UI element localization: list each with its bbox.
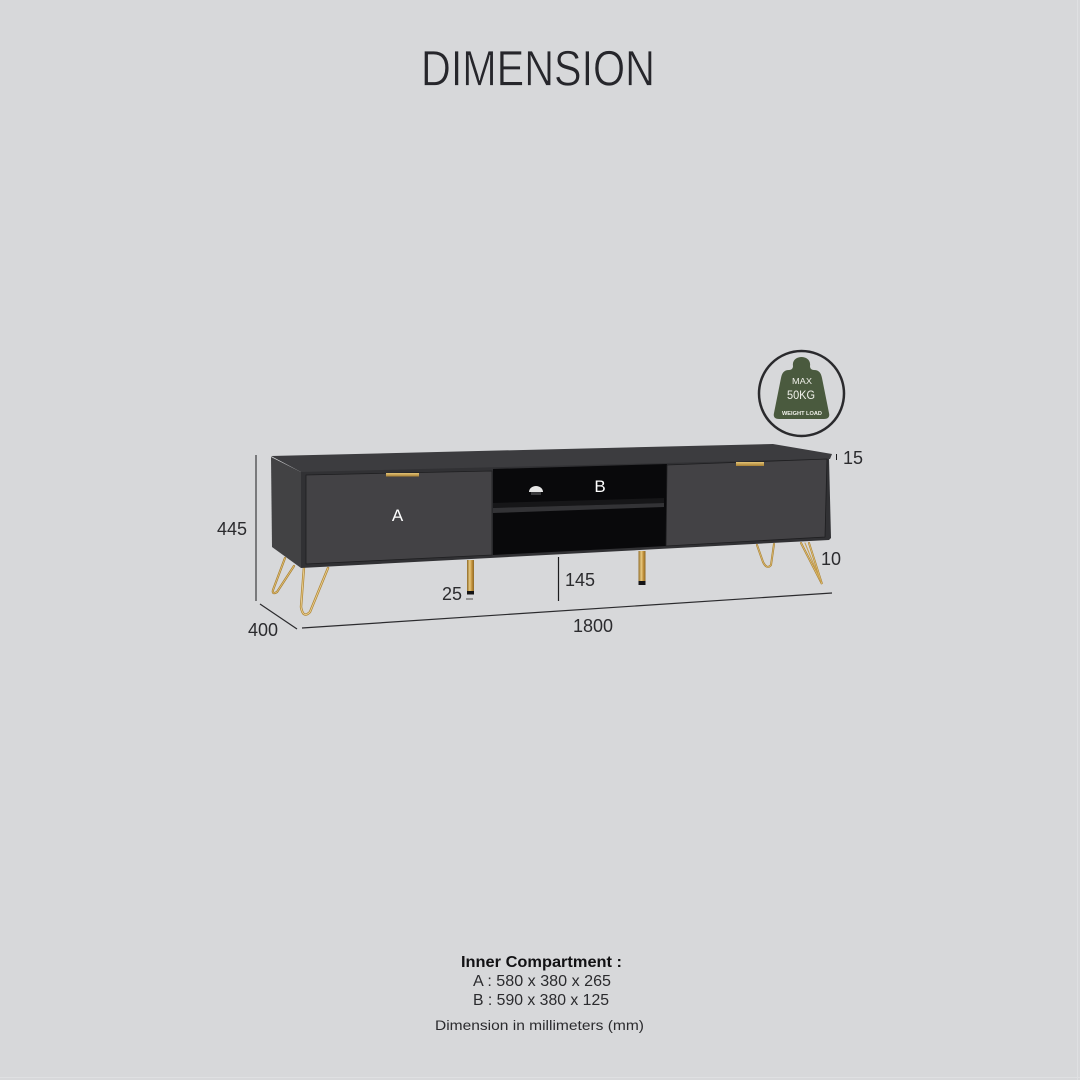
dimension line: depth 400: 400 <box>248 620 278 640</box>
heading: Inner Compartment : <box>461 954 622 971</box>
drawer A <box>306 471 492 564</box>
dimension line: width 1800 <box>302 593 832 636</box>
dimension: leg width 25 <box>442 584 473 604</box>
dimension: leg clearance 145: 145 <box>565 570 595 590</box>
dimension line: height 445: 445 <box>217 519 247 539</box>
cabinet front frame <box>301 458 831 568</box>
centre leg left <box>467 560 474 594</box>
drawer right <box>666 459 827 546</box>
dimension: base thickness 10: 10 <box>821 549 841 569</box>
dimension line: depth 400 <box>248 604 297 640</box>
hairpin legs: front right <box>801 543 822 584</box>
dimension: top thickness 15: 15 <box>843 448 863 468</box>
dimension line: width 1800: 1800 <box>573 616 613 636</box>
hairpin legs: rear right <box>757 544 774 567</box>
badge text: 50kg: 50KG <box>787 388 815 402</box>
badge: max weight load <box>759 351 844 436</box>
inner compartment text block <box>435 954 644 1033</box>
label B: B <box>594 477 606 496</box>
hairpin legs: rear left <box>273 558 294 593</box>
cabinet top surface <box>271 444 832 472</box>
compartment B size: B : 590 x 380 x 125 <box>473 992 609 1009</box>
TV console illustration <box>271 444 832 615</box>
drawer right handle <box>736 462 764 466</box>
badge ring <box>759 351 844 436</box>
hairpin legs: front left <box>301 567 328 615</box>
dimension: leg width 25: 25 <box>442 584 462 604</box>
label A: A <box>392 506 404 525</box>
title: DIMENSION <box>421 40 655 96</box>
icon: weight <box>774 357 829 419</box>
cable hole <box>529 486 543 492</box>
compartment A size: A : 580 x 380 x 265 <box>473 973 611 990</box>
open shelf compartment <box>493 464 667 555</box>
badge text: max: MAX <box>792 377 813 386</box>
dimension: leg clearance 145 <box>558 557 595 601</box>
cabinet side panel <box>271 457 301 568</box>
badge text: weight load: WEIGHT LOAD <box>782 411 822 417</box>
centre leg right <box>638 551 646 585</box>
units note: Dimension in millimeters (mm) <box>435 1018 644 1033</box>
drawer A handle <box>386 473 419 476</box>
